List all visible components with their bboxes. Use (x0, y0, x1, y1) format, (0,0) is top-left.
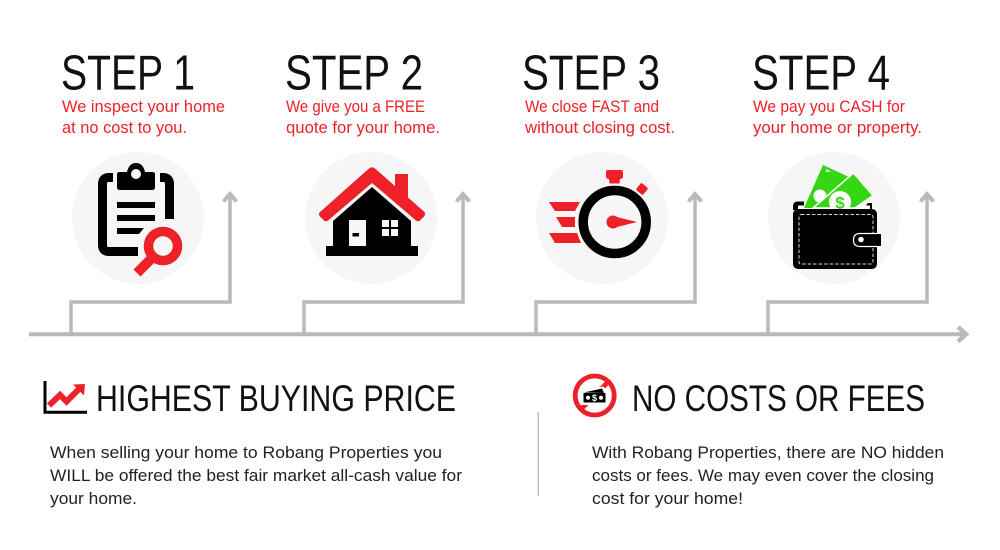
step 4 description: your home or property. (753, 118, 922, 137)
step 1 heading: STEP 1 (61, 46, 195, 100)
body text: WILL be offered the best fair market all-cash value for (50, 466, 462, 485)
body text: your home. (50, 489, 137, 508)
body text: With Robang Properties, there are NO hidden (592, 443, 944, 462)
step 3 description (524, 97, 675, 137)
step 1 description: We inspect your home (62, 97, 225, 116)
step 2 (285, 46, 440, 284)
heading: HIGHEST BUYING PRICE (96, 378, 456, 419)
step 2 description: We give you a FREE (286, 97, 425, 116)
body text (592, 443, 944, 508)
icon: stopwatch (536, 152, 668, 284)
icon: wallet with cash (768, 152, 900, 284)
step 1 description (62, 97, 225, 137)
step 3 description: We close FAST and (525, 97, 659, 116)
step 2 description (286, 97, 440, 137)
icon: rising chart (45, 381, 87, 412)
icon: no money sign (575, 376, 614, 415)
step 4 heading: STEP 4 (752, 46, 890, 100)
step 3 description: without closing cost. (524, 118, 675, 137)
step 1 description: at no cost to you. (62, 118, 187, 137)
panel: no costs or fees (575, 376, 944, 508)
step 3 (522, 46, 675, 284)
body text: cost for your home! (592, 489, 743, 508)
icon: no money sign: $ (592, 393, 597, 403)
step 4 description (753, 97, 922, 137)
step 1 (61, 46, 225, 284)
heading: NO COSTS OR FEES (632, 378, 925, 419)
step 4 description: We pay you CASH for (753, 97, 905, 116)
step 2 description: quote for your home. (286, 118, 440, 137)
step 2 heading: STEP 2 (285, 46, 423, 100)
body text: costs or fees. We may even cover the closing (592, 466, 934, 485)
step 4 (752, 46, 922, 284)
icon: wallet with cash: $ (835, 194, 845, 212)
icon: house (305, 152, 437, 284)
timeline with connector arrows (29, 194, 966, 342)
body text: When selling your home to Robang Properties you (50, 443, 442, 462)
body text (50, 443, 462, 508)
panel: highest buying price (45, 378, 462, 508)
step 3 heading: STEP 3 (522, 46, 660, 100)
icon: clipboard with magnifier (72, 152, 204, 284)
